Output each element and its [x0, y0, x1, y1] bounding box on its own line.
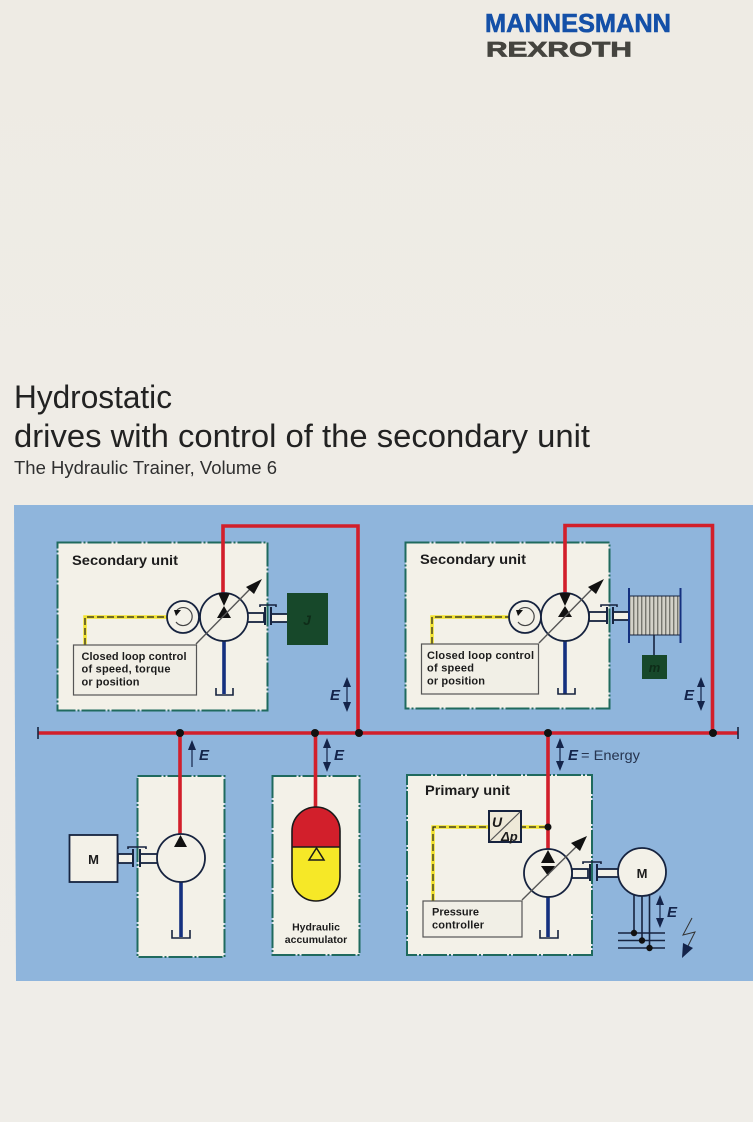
U over delta p converter [489, 811, 521, 844]
energy arrows [188, 677, 705, 928]
tank return [179, 882, 183, 937]
lightning bolt [682, 918, 695, 958]
logo [485, 8, 671, 62]
mass load: m [649, 660, 661, 675]
energy arrow right secondary [684, 677, 705, 711]
controller label box: controller [432, 920, 485, 932]
tank return [546, 897, 550, 937]
energy legend [556, 738, 640, 771]
panel: secondary unit left [58, 542, 268, 710]
control label box [74, 645, 196, 695]
variable pump [541, 593, 589, 641]
energy arrow left secondary: E [330, 687, 341, 704]
electric motor [618, 848, 666, 896]
shaft and coupling [572, 862, 619, 881]
energy legend: E [568, 747, 579, 764]
pressure signal line [433, 827, 548, 901]
tank return [222, 641, 226, 694]
control label box [422, 644, 538, 694]
energy arrow motor [656, 895, 678, 928]
heading: secondary unit right: Secondary unit [420, 551, 526, 567]
panel: hydraulic accumulator [272, 776, 360, 955]
subtitle: The Hydraulic Trainer, Volume 6 [14, 458, 277, 478]
variable pump [200, 593, 248, 641]
shaft and coupling [247, 605, 288, 625]
adjust arrow [196, 579, 262, 644]
accumulator vessel [292, 807, 340, 901]
controller label box [423, 901, 522, 937]
tacho [509, 601, 541, 633]
energy arrow accumulator [323, 738, 345, 772]
heading: secondary unit: Secondary unit [72, 552, 178, 568]
energy legend: = Energy [581, 747, 640, 763]
control label box: of speed [427, 662, 474, 674]
energy arrow left secondary [330, 677, 351, 712]
title: Hydrostatic [14, 379, 172, 415]
panel: secondary unit right [406, 542, 610, 708]
panel: primary unit [407, 775, 592, 955]
control signal line [85, 617, 168, 645]
control label box: or position [82, 676, 140, 688]
secondary unit left: hydraulic circuit [74, 579, 328, 695]
primary unit circuit [423, 811, 695, 958]
inertia load: J [303, 612, 312, 628]
logo: Mannesmann: MANNESMANN [485, 8, 671, 38]
inertia load [287, 593, 328, 645]
U over delta p converter: U [492, 814, 503, 830]
shaft and coupling [118, 847, 158, 867]
energy arrow accumulator: E [334, 747, 345, 764]
title [14, 379, 590, 454]
tank return [563, 641, 567, 694]
blue diagram panel [14, 505, 753, 981]
logo: Rexroth: REXROTH [486, 38, 632, 62]
energy arrow motor: E [667, 904, 678, 921]
accumulator label [285, 922, 347, 946]
title: drives with control of the secondary unit [14, 418, 590, 454]
shaft and coupling [589, 605, 630, 624]
motor box: M [88, 852, 99, 867]
control label box: Closed loop control [427, 650, 534, 662]
secondary unit right: hydraulic circuit [422, 579, 680, 694]
winch drum [629, 588, 680, 655]
control label box: Closed loop control [82, 651, 186, 663]
adjust arrow [539, 579, 604, 643]
U over delta p converter: Δp [500, 829, 518, 844]
tacho [167, 601, 199, 633]
fixed pump [157, 834, 205, 882]
panel: drive pump [138, 776, 224, 957]
mass load [642, 655, 667, 679]
energy arrow drive pump [188, 740, 210, 767]
pressure bus lines [38, 526, 738, 849]
mains wiring [618, 890, 665, 951]
controller label box: Pressure [432, 906, 479, 918]
energy arrow drive pump: E [199, 747, 210, 764]
energy arrow right secondary: E [684, 687, 695, 704]
accumulator label: accumulator [285, 934, 347, 946]
electric motor: M [637, 866, 647, 881]
drive pump with motor [70, 834, 205, 938]
control signal line [432, 617, 510, 644]
heading: primary unit: Primary unit [425, 782, 510, 798]
control label box: or position [427, 676, 485, 688]
hydraulic accumulator [285, 807, 347, 946]
accumulator label: Hydraulic [292, 922, 340, 934]
variable pump [524, 849, 572, 897]
adjust arrow [522, 836, 587, 900]
control label box: of speed, torque [82, 664, 170, 676]
